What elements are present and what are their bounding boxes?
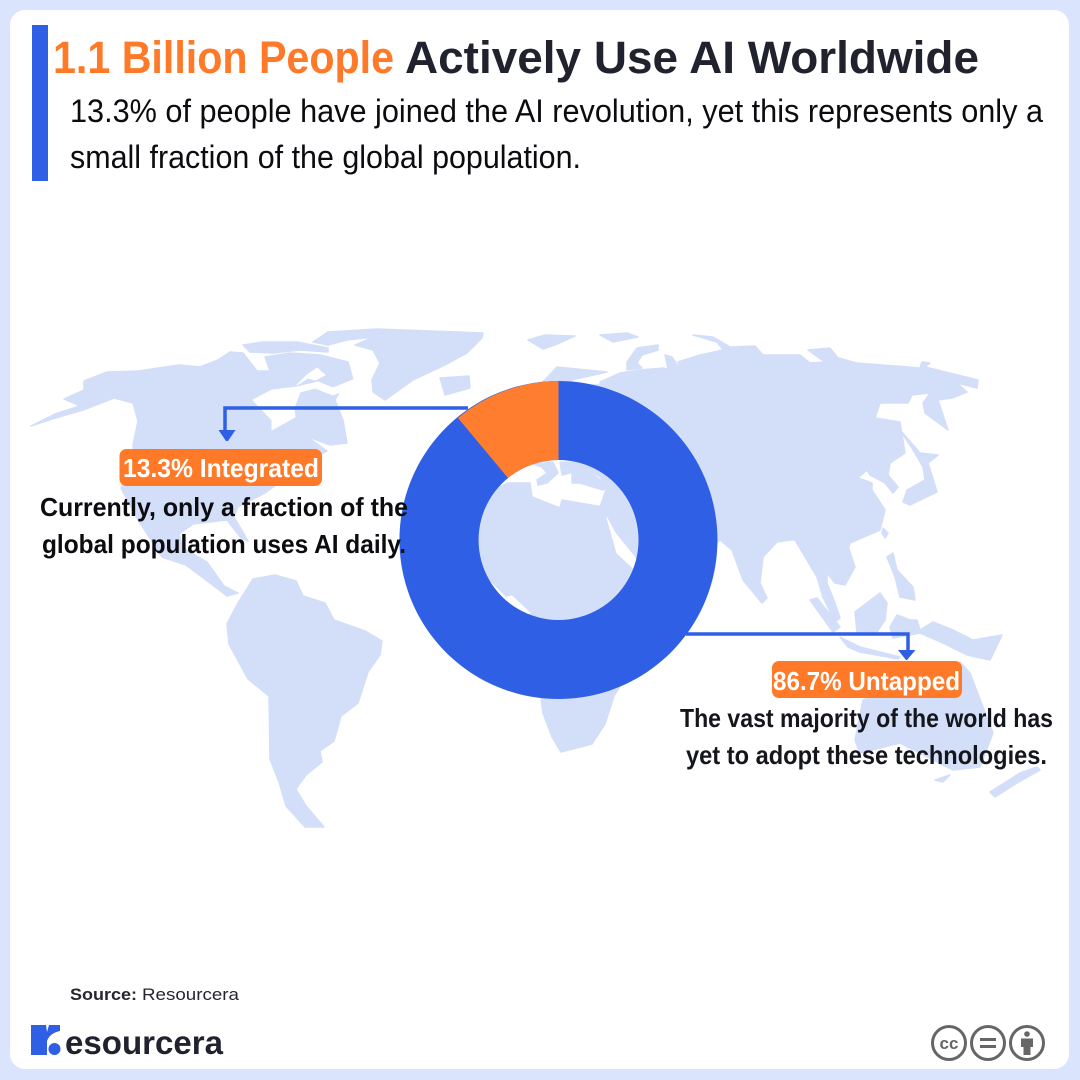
subtitle: small fraction of the global population.: [70, 139, 581, 175]
subtitle: 13.3% of people have joined the AI revolution, yet this represents only a: [70, 93, 1043, 129]
source: [70, 985, 240, 1004]
callout: 13.3% integrated: 13.3% Integrated: [123, 453, 319, 483]
donut chart: [399, 381, 717, 699]
callout: 86.7% untapped: [680, 661, 1053, 770]
world map: [31, 329, 1040, 827]
arrow: to 86.7% callout: [686, 634, 916, 660]
callout: 86.7% untapped: yet to adopt these technologies.: [686, 740, 1047, 770]
callout: 86.7% untapped: 86.7% Untapped: [773, 666, 960, 696]
source: Resourcera: [142, 985, 240, 1004]
callout: 13.3% integrated: global population uses AI daily.: [42, 529, 406, 559]
segment: 13.3% integrated: [458, 381, 558, 478]
header accent bar: [32, 25, 48, 181]
icon: equals: [972, 1026, 1004, 1060]
callout: 13.3% integrated: Currently, only a fraction of the: [40, 492, 408, 522]
callout: 13.3% integrated: [40, 449, 408, 559]
arrow: to 13.3% callout: [218, 408, 468, 441]
source: Source:: [70, 985, 137, 1004]
title: Actively Use AI Worldwide: [405, 32, 979, 83]
subtitle: [70, 93, 1043, 175]
logo: resourcera: esourcera: [65, 1024, 224, 1061]
icon: creative commons licence: [932, 1026, 1044, 1060]
title: [53, 32, 979, 83]
icon: cc: cc: [940, 1034, 958, 1053]
segment: 86.7% untapped: [399, 381, 717, 699]
title: 1.1 Billion People: [53, 32, 394, 83]
icon: person: [1010, 1026, 1044, 1060]
